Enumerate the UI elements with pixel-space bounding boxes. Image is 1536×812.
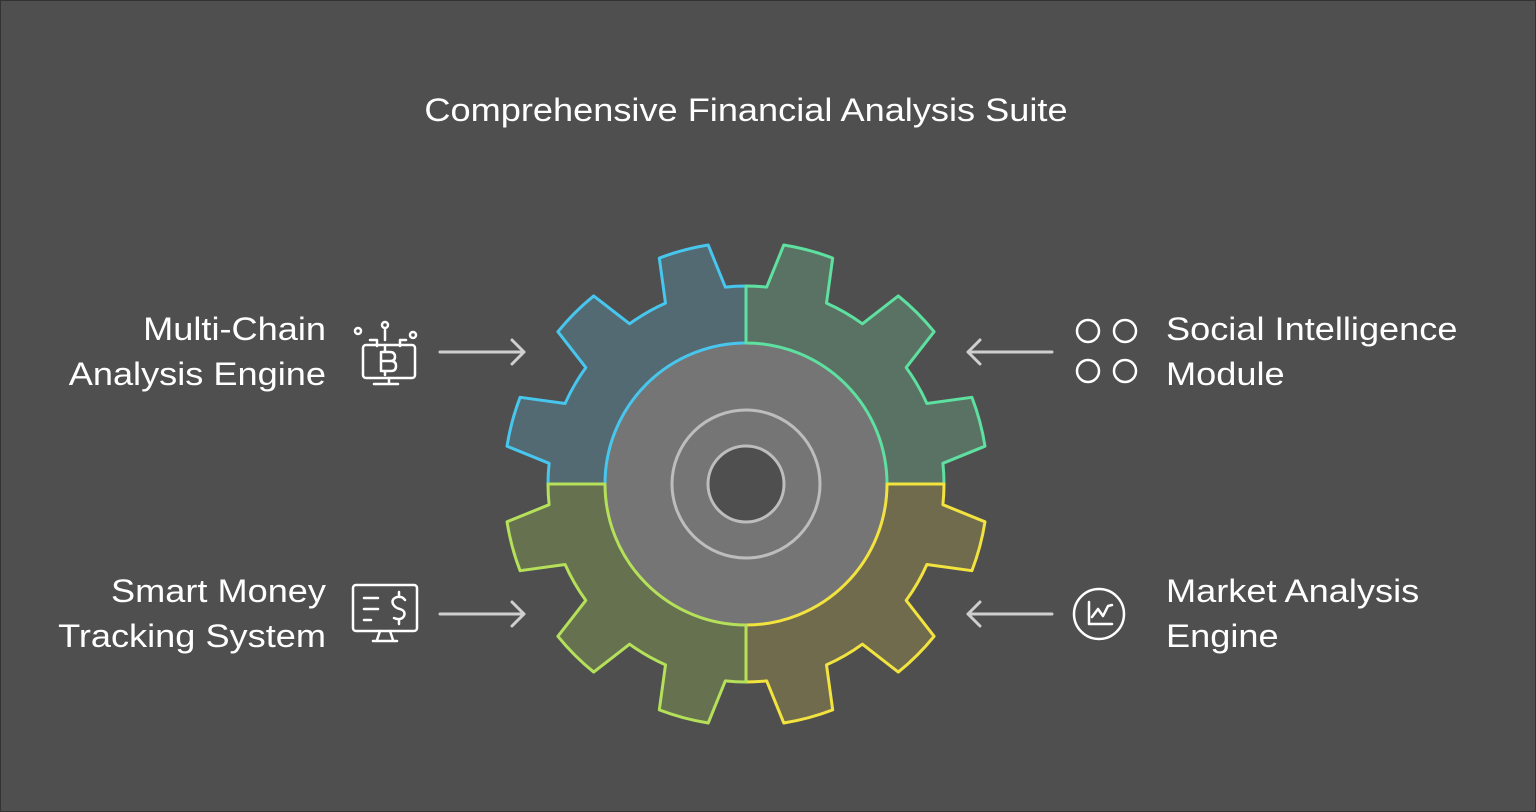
- arrows: [440, 340, 1052, 626]
- icon: four circles: [1077, 320, 1136, 382]
- icon: chart circle: [1074, 589, 1124, 639]
- icon: bitcoin monitor: [355, 322, 416, 384]
- label: smart money: Smart Money: [111, 573, 326, 609]
- label: multi-chain: Analysis Engine: [69, 356, 326, 392]
- label: multi-chain: Multi-Chain: [143, 311, 326, 347]
- icon: dollar monitor: [353, 585, 417, 641]
- gear: [507, 245, 985, 723]
- label: multi-chain: [68, 311, 326, 392]
- label: market: Market Analysis: [1166, 573, 1419, 609]
- label: market: Engine: [1166, 618, 1279, 654]
- title: Comprehensive Financial Analysis Suite: [424, 92, 1068, 128]
- label: smart money: Tracking System: [58, 618, 326, 654]
- label: market: [1166, 573, 1419, 654]
- label: social: Social Intelligence: [1166, 311, 1457, 347]
- label: smart money: [58, 573, 326, 654]
- label: social: Module: [1166, 356, 1285, 392]
- label: social: [1166, 311, 1457, 392]
